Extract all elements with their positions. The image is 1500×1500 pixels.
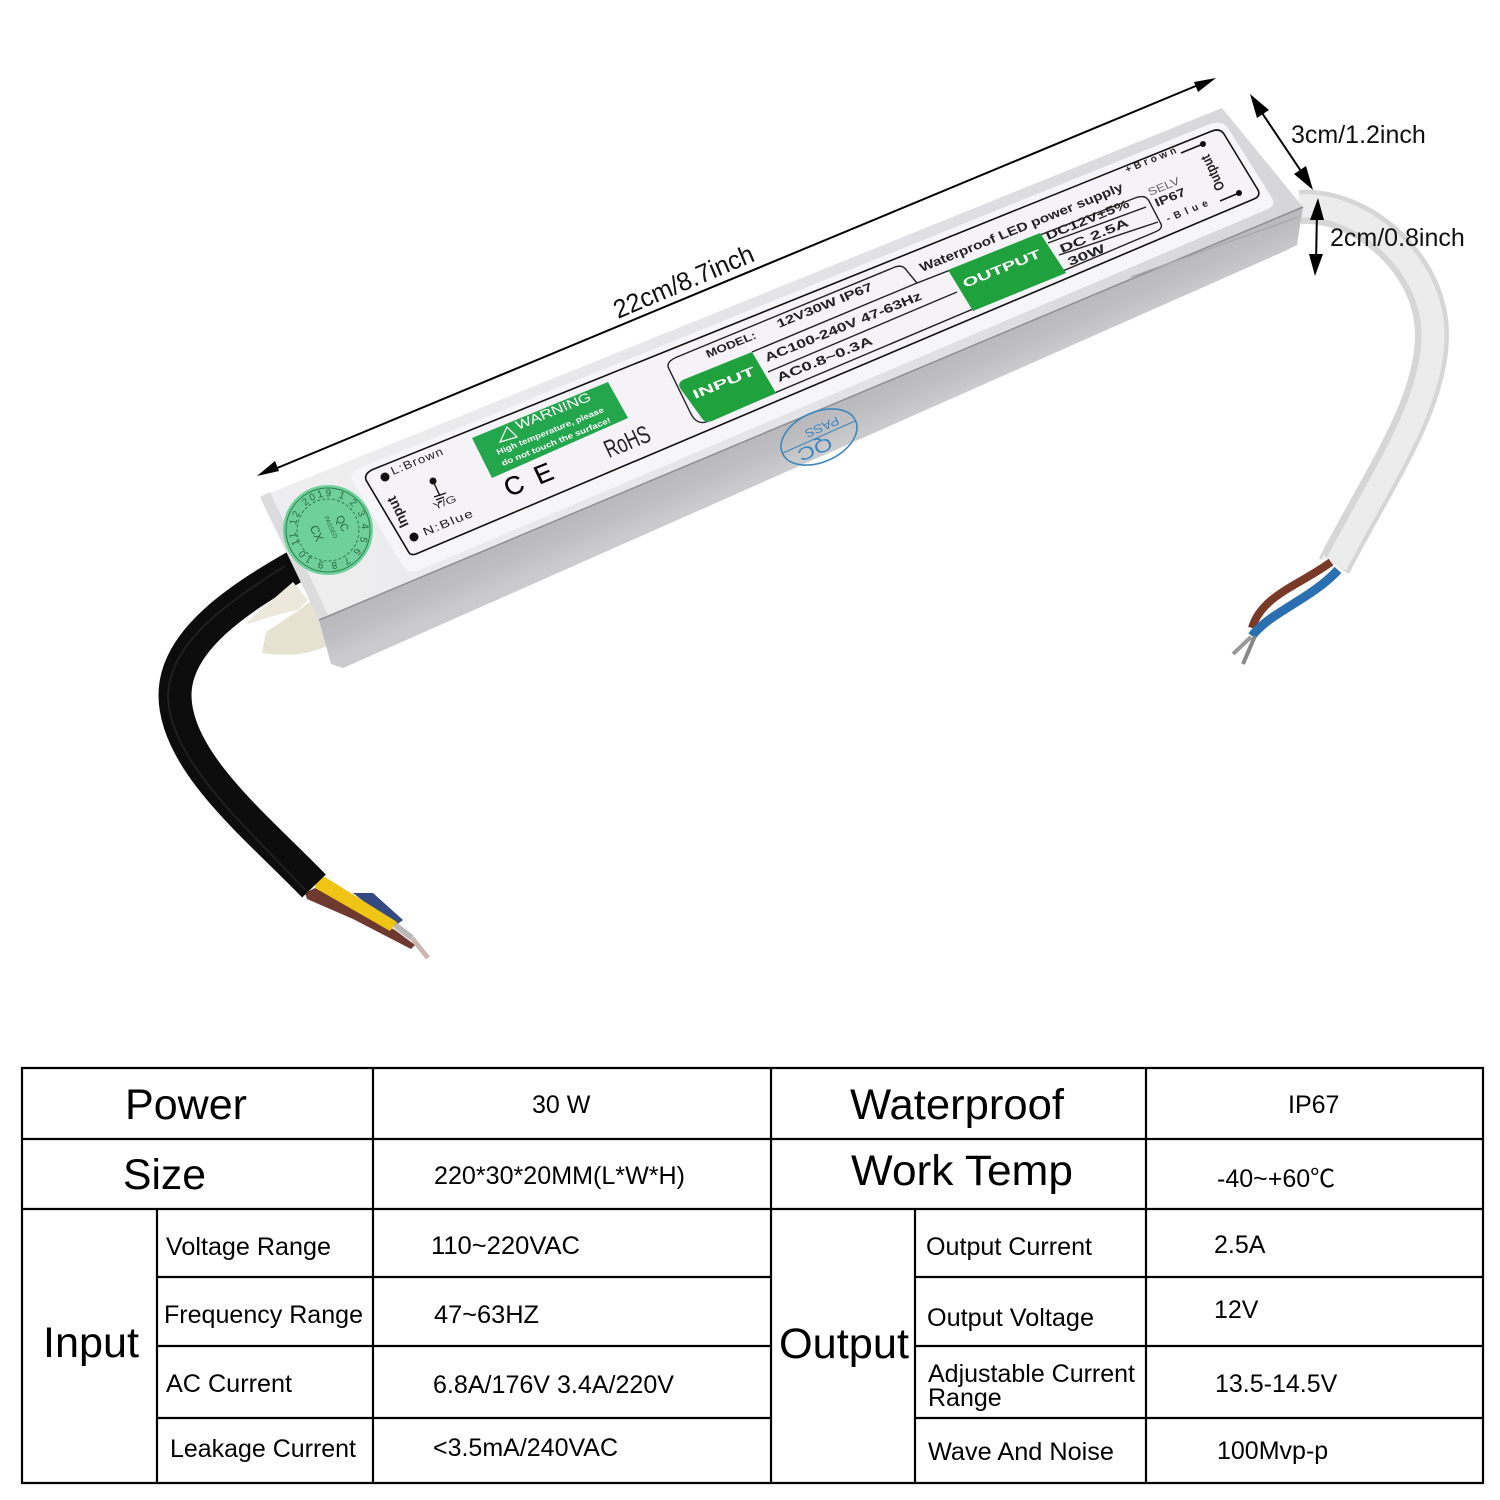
QC PASS blue stamp: PASS xyxy=(803,414,841,440)
output section: Output Current xyxy=(926,1233,1092,1261)
input section: <3.5mA/240VAC xyxy=(433,1434,618,1462)
warning label: do not touch the surface! xyxy=(500,416,612,468)
input section: Input xyxy=(43,1319,139,1367)
spec frame lines xyxy=(668,197,1161,423)
QC sticker: green round seal: QC xyxy=(333,514,351,534)
spec texts: DC12V±5% xyxy=(1043,197,1132,243)
spec texts: INPUT xyxy=(690,364,758,402)
row: size and work temp: Work Temp xyxy=(851,1147,1073,1195)
CE mark: CE xyxy=(499,457,558,502)
input section: Leakage Current xyxy=(170,1435,356,1463)
table grid xyxy=(22,1068,1483,1483)
output section: Output xyxy=(779,1320,909,1368)
spec texts: OUTPUT xyxy=(960,247,1044,291)
output right terminals: Output xyxy=(1197,152,1228,194)
QC sticker: green round seal: 2019 1 2 3 4 5 6 7 8 9 10 11 12 xyxy=(289,489,369,569)
row: size and work temp xyxy=(123,1147,1335,1199)
spec texts: DC 2.5A xyxy=(1057,215,1131,256)
row: size and work temp: Size xyxy=(123,1151,206,1199)
output green block xyxy=(948,233,1066,311)
warning label: High temperature, please xyxy=(495,405,606,457)
input section: Voltage Range xyxy=(166,1233,331,1261)
input section: 6.8A/176V 3.4A/220V xyxy=(433,1371,674,1399)
input wires xyxy=(305,877,428,958)
spec texts: Waterproof LED power supply xyxy=(917,180,1125,275)
warning label xyxy=(472,382,628,478)
QC sticker: green round seal: PASSED xyxy=(322,515,338,540)
spec texts: AC0.8~0.3A xyxy=(774,334,875,385)
output section: Adjustable Current xyxy=(928,1360,1135,1388)
spec texts: AC100-240V 47-63Hz xyxy=(762,289,924,365)
end face edge xyxy=(260,492,328,620)
input left terminals: L:Brown xyxy=(389,446,446,478)
row: size and work temp: 220*30*20MM(L*W*H) xyxy=(434,1162,685,1190)
output right terminals: -Blue xyxy=(1165,198,1210,225)
output right terminals xyxy=(1124,141,1242,225)
warning label: WARNING xyxy=(513,389,593,433)
output right terminals: +Brown xyxy=(1124,146,1178,176)
output section: 13.5-14.5V xyxy=(1215,1370,1338,1398)
row: power and waterproof: IP67 xyxy=(1288,1091,1339,1119)
device body xyxy=(260,108,1303,668)
row: power and waterproof: 30 W xyxy=(532,1091,591,1119)
output section xyxy=(779,1231,1338,1466)
output right terminals: SELV xyxy=(1146,175,1183,199)
QC PASS blue stamp xyxy=(772,398,866,476)
input section: Frequency Range xyxy=(164,1301,363,1329)
input left terminals xyxy=(380,446,476,542)
input left terminals: Y/G xyxy=(432,494,459,513)
output section: Wave And Noise xyxy=(928,1438,1114,1466)
edge shadow xyxy=(319,207,1303,620)
row: power and waterproof: Power xyxy=(125,1081,247,1129)
side groove xyxy=(1131,217,1298,277)
length dimension arrow xyxy=(257,78,1216,476)
device photo: white output cable xyxy=(1300,206,1433,578)
QC PASS blue stamp: QC xyxy=(795,433,835,465)
top face xyxy=(260,108,1303,620)
output wires xyxy=(1233,562,1338,664)
input section xyxy=(43,1232,674,1463)
output section: 12V xyxy=(1214,1296,1259,1324)
spec texts: 12V30W IP67 xyxy=(774,280,875,331)
spec texts xyxy=(690,180,1132,402)
input green block xyxy=(679,352,776,422)
output section: Output Voltage xyxy=(927,1304,1094,1332)
RoHS mark: RoHS xyxy=(600,420,655,463)
output section: Range xyxy=(928,1384,1002,1412)
side face xyxy=(319,207,1303,668)
row: size and work temp: -40~+60℃ xyxy=(1217,1165,1335,1193)
input section: 47~63HZ xyxy=(434,1301,539,1329)
input left terminals: N:Blue xyxy=(421,508,476,539)
output right terminals: IP67 xyxy=(1152,185,1188,210)
spec table xyxy=(22,1068,1483,1483)
spec texts: 30W xyxy=(1065,241,1108,269)
input section: AC Current xyxy=(166,1370,292,1398)
sticker outer frame xyxy=(366,130,1259,555)
height dimension arrow xyxy=(1309,198,1324,276)
spec texts: MODEL: xyxy=(704,330,758,361)
input section: 110~220VAC xyxy=(431,1232,580,1260)
row: power and waterproof: Waterproof xyxy=(850,1081,1065,1129)
black input cable xyxy=(168,566,314,890)
QC sticker: green round seal: CX xyxy=(307,523,326,544)
output section: 2.5A xyxy=(1214,1231,1266,1259)
mounting tab xyxy=(248,582,328,655)
length label: 22cm/8.7inch xyxy=(609,238,758,325)
label sticker xyxy=(351,123,1273,572)
width dimension arrow xyxy=(1250,94,1313,190)
row: power and waterproof xyxy=(125,1081,1339,1129)
width label: 3cm/1.2inch xyxy=(1291,121,1426,149)
height label: 2cm/0.8inch xyxy=(1330,224,1465,252)
input left terminals: Input xyxy=(383,494,412,531)
output section: 100Mvp-p xyxy=(1217,1437,1328,1465)
